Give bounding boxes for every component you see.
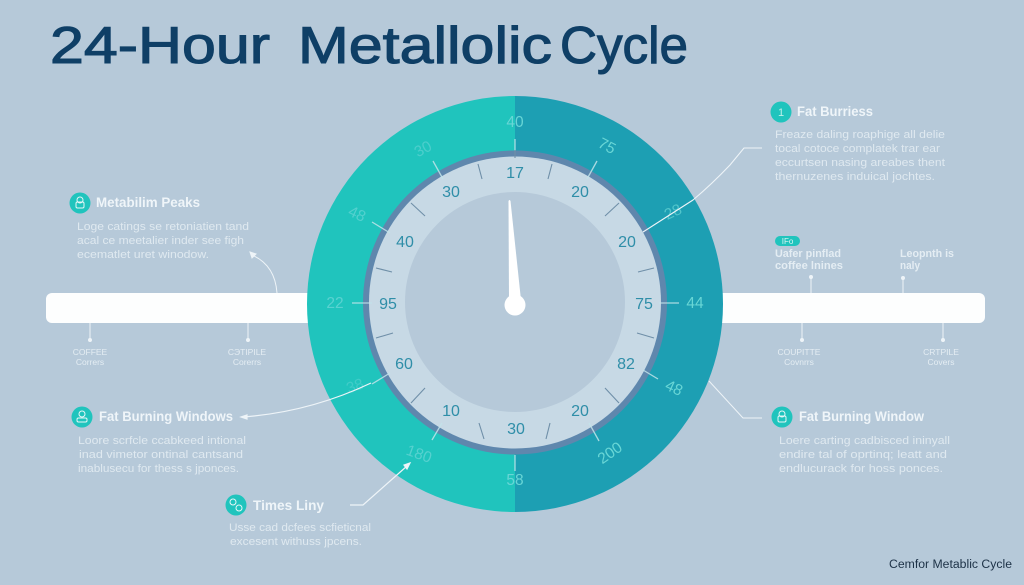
inner scale numbers: 82 — [617, 356, 635, 373]
callout: fat burning window: endlucurack for hoss ponces. — [779, 463, 943, 475]
callout: fat burners: thernuzenes induical jochtes. — [775, 171, 935, 183]
inner scale numbers — [379, 165, 653, 438]
icon: number badge — [770, 102, 792, 122]
inner scale numbers: 95 — [379, 296, 397, 313]
light scale band — [369, 156, 661, 448]
callout: times liny: Usse cad dcfees scfieticnal — [229, 522, 371, 534]
title: Cycle — [560, 17, 688, 75]
callout: times liny: excesent withuss jpcens. — [230, 536, 362, 548]
callout: metabolism peaks: ecematlet uret winodow. — [77, 249, 209, 261]
callout: fat burning windows: inablusecu for thess s jponces. — [78, 463, 239, 475]
callout: fat burners: Freaze daling roaphige all delie — [775, 129, 945, 141]
callout: fat burners: eccurtsen nasing areabes thent — [775, 157, 945, 169]
outer ring numbers: 75 — [595, 135, 618, 158]
callout: times liny — [226, 494, 371, 548]
arrow: times liny — [350, 463, 410, 505]
right timeline bar — [714, 293, 985, 323]
inner ticks — [376, 150, 654, 439]
inner scale numbers: 40 — [396, 234, 414, 251]
outer ring numbers: 30 — [412, 138, 435, 161]
outer ring numbers: 38 — [344, 376, 366, 397]
callout: fat burning window: Fat Burning Window — [799, 409, 924, 424]
footer credit: Cemfor Metablic Cycle — [889, 559, 1012, 571]
callout: fat burning window: Loere carting cadbisced ininyall — [779, 435, 950, 447]
right bar bottom labels: Covers — [928, 357, 954, 367]
callout: metabolism peaks — [70, 192, 249, 261]
callout: fat burners: Fat Burriess — [797, 104, 873, 119]
tick marks — [352, 139, 679, 471]
outer ring numbers — [326, 114, 704, 489]
callout: metabolism peaks: acal ce meetalier inder see figh — [77, 235, 244, 247]
title — [50, 17, 688, 75]
outer ring numbers: 180 — [404, 442, 434, 467]
right bar top labels: Leopnth is — [900, 248, 954, 260]
callout: metabolism peaks: Metabilim Peaks — [96, 195, 200, 210]
callout: fat burners: tocal cotoce complatek trar ear — [775, 143, 940, 155]
callout: fat burning windows: inad vimetor ontinal cantsand — [79, 449, 243, 461]
right bar bottom labels: CRTPILE — [923, 347, 959, 357]
left bar labels — [73, 323, 266, 367]
callout: fat burning window: endire tal of oprtinq; leatt and — [779, 449, 947, 461]
tag: IFo — [782, 237, 794, 246]
outer ring numbers: 58 — [506, 472, 524, 489]
right bar bottom labels — [778, 323, 959, 367]
inner scale numbers: 60 — [395, 356, 413, 373]
right bar top labels: Uafer pinflad — [775, 248, 841, 260]
callout: metabolism peaks: Loge catings se retoniatien tand — [77, 221, 249, 233]
title: 24-Hour — [50, 17, 270, 75]
left bar labels: Corrers — [76, 357, 104, 367]
dial — [307, 96, 723, 512]
outer ring numbers: 22 — [326, 295, 344, 312]
right bar bottom labels: COUPITTE — [778, 347, 821, 357]
callout: fat burners — [770, 102, 945, 183]
callout: fat burning windows: Loore scrfcle ccabkeed intional — [78, 435, 246, 447]
outer ring numbers: 44 — [686, 295, 704, 312]
outer ring numbers: 28 — [662, 201, 685, 224]
arrow: fat burning window — [709, 381, 762, 418]
dark ring — [363, 150, 667, 454]
inner scale numbers: 20 — [571, 403, 589, 420]
inner disc — [405, 192, 625, 412]
title: Metallolic — [298, 17, 552, 75]
outer ring numbers: 48 — [345, 203, 368, 226]
icon: lock badge — [772, 406, 792, 428]
outer ring numbers: 48 — [662, 377, 685, 400]
inner scale numbers: 10 — [442, 403, 460, 420]
right bar bottom labels: Covnrrs — [784, 357, 814, 367]
inner scale numbers: 75 — [635, 296, 653, 313]
icon: lock badge — [70, 192, 90, 214]
callout: fat burning window — [772, 406, 950, 475]
outer ring numbers: 40 — [506, 114, 524, 131]
inner scale numbers: 30 — [442, 184, 460, 201]
right bar top labels: naly — [900, 260, 921, 272]
inner scale numbers: 20 — [618, 234, 636, 251]
right bar top labels: coffee lnines — [775, 260, 843, 272]
left bar labels: COFFEE — [73, 347, 108, 357]
arrow: fat burners — [643, 148, 762, 232]
left timeline bar — [46, 293, 316, 323]
arrow: metabolism peaks — [250, 252, 277, 293]
right bar top labels — [775, 236, 954, 293]
callout: fat burning windows — [72, 406, 246, 475]
outer ring right half — [515, 96, 723, 512]
arrow: fat burning windows — [241, 383, 371, 419]
icon: person badge — [72, 406, 92, 428]
inner scale numbers: 30 — [507, 421, 525, 438]
icon: number badge: 1 — [778, 107, 784, 119]
outer ring left half — [307, 96, 515, 512]
callout: times liny: Times Liny — [253, 498, 324, 513]
left bar labels: Corerrs — [233, 357, 261, 367]
outer ring numbers: 200 — [595, 439, 626, 468]
left bar labels: CЭTIPILE — [228, 347, 266, 357]
icon: key badge — [226, 494, 246, 516]
inner scale numbers: 20 — [571, 184, 589, 201]
callout: fat burning windows: Fat Burning Windows — [99, 409, 233, 424]
needle — [504, 200, 526, 316]
tag — [775, 236, 800, 246]
inner scale numbers: 17 — [506, 165, 524, 182]
